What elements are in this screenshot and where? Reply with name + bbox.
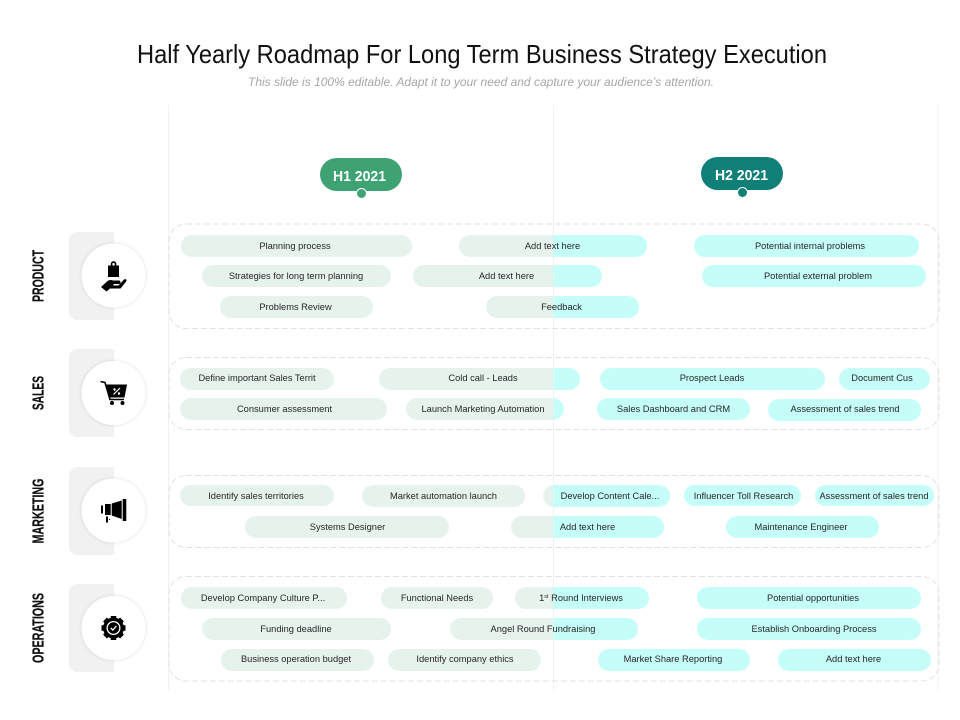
subtitle: This slide is 100% editable. Adapt it to your need and capture your audience’s attention. xyxy=(248,75,714,89)
task pills: operations xyxy=(181,587,931,671)
icon panel: sales xyxy=(69,349,114,437)
task pills: sales: Define important Sales Territ xyxy=(198,373,316,383)
task pills: sales: Assessment of sales trend xyxy=(790,404,900,414)
task pills: operations: Round Interviews xyxy=(549,593,623,603)
task pills: operations: Business operation budget xyxy=(241,654,351,664)
icon panel: marketing xyxy=(69,467,114,555)
label: product: PRODUCT xyxy=(30,250,48,302)
task pills: sales: Launch Marketing Automation xyxy=(421,404,545,414)
task pills: marketing xyxy=(180,485,934,538)
task pills: marketing: Market automation launch xyxy=(390,491,497,501)
task pills: marketing: Assessment of sales trend xyxy=(819,491,929,501)
task pills: product: Feedback xyxy=(541,302,582,312)
task pills: marketing: Identify sales territories xyxy=(208,491,304,501)
icon circle: marketing xyxy=(82,478,146,542)
icon circle: operations xyxy=(82,596,146,660)
task pills: operations: Functional Needs xyxy=(401,593,474,603)
task pills: product: Problems Review xyxy=(259,302,332,312)
task pills: operations: st xyxy=(544,594,549,600)
task pills: operations: Establish Onboarding Process xyxy=(751,624,877,634)
badge: H1 2021: H1 2021 xyxy=(333,168,386,185)
label: operations: OPERATIONS xyxy=(30,593,48,663)
task pills: product: Add text here xyxy=(525,241,580,251)
task pills: operations: Develop Company Culture P... xyxy=(201,593,325,603)
task pills: marketing: Develop Content Cale... xyxy=(561,491,659,501)
task pills: marketing: Add text here xyxy=(560,522,615,532)
icon: megaphone xyxy=(101,499,126,522)
task pills: product: Add text here xyxy=(479,271,534,281)
icon circle: product xyxy=(82,244,146,308)
swimlane box: sales xyxy=(169,358,939,430)
badge: H2 2021 xyxy=(701,157,783,198)
swimlane box: marketing xyxy=(169,476,939,548)
task pills: product: Planning process xyxy=(259,241,331,251)
title: Half Yearly Roadmap For Long Term Business Strategy Execution xyxy=(137,39,827,69)
icon panel: product xyxy=(69,232,114,320)
swimlane box: operations xyxy=(169,576,939,681)
task pills: sales: Document Cus xyxy=(851,373,913,383)
task pills: operations: Market Share Reporting xyxy=(624,654,722,664)
task pills: product: Potential external problem xyxy=(764,271,872,281)
task pills: operations: Add text here xyxy=(826,654,881,664)
label: marketing: MARKETING xyxy=(30,478,48,544)
icon circle: sales xyxy=(82,361,146,425)
badge: H2 2021: H2 2021 xyxy=(715,167,768,184)
task pills: operations: Angel Round Fundraising xyxy=(491,624,595,634)
task pills: sales: Consumer assessment xyxy=(237,404,332,414)
row: marketing xyxy=(30,467,939,555)
row: product xyxy=(30,224,939,328)
task pills: operations: Identify company ethics xyxy=(416,654,514,664)
row: operations xyxy=(30,576,939,681)
task pills: product: Strategies for long term planning xyxy=(229,271,363,281)
task pills: sales: Prospect Leads xyxy=(680,373,745,383)
icon: shopping cart xyxy=(100,382,127,405)
icon: hand holding bag xyxy=(101,261,127,292)
task pills: marketing: Systems Designer xyxy=(310,522,385,532)
task pills: product xyxy=(181,235,926,318)
timeline column grid lines xyxy=(168,105,938,690)
task pills: product: Potential internal problems xyxy=(755,241,865,251)
task pills: marketing: Maintenance Engineer xyxy=(754,522,848,532)
swimlane box: product xyxy=(169,224,939,328)
task pills: sales xyxy=(180,368,930,421)
task pills: marketing: Influencer Toll Research xyxy=(694,491,793,501)
task pills: sales: Cold call - Leads xyxy=(448,373,518,383)
task pills: operations: 1 xyxy=(539,593,544,603)
task pills: operations: Potential opportunities xyxy=(767,593,859,603)
row: sales xyxy=(30,349,939,437)
task pills: operations: Funding deadline xyxy=(260,624,332,634)
badge: H1 2021 xyxy=(320,158,402,198)
icon panel: operations xyxy=(69,584,114,672)
icon: gear with check xyxy=(102,616,126,640)
task pills: sales: Sales Dashboard and CRM xyxy=(617,404,730,414)
label: sales: SALES xyxy=(30,376,48,410)
